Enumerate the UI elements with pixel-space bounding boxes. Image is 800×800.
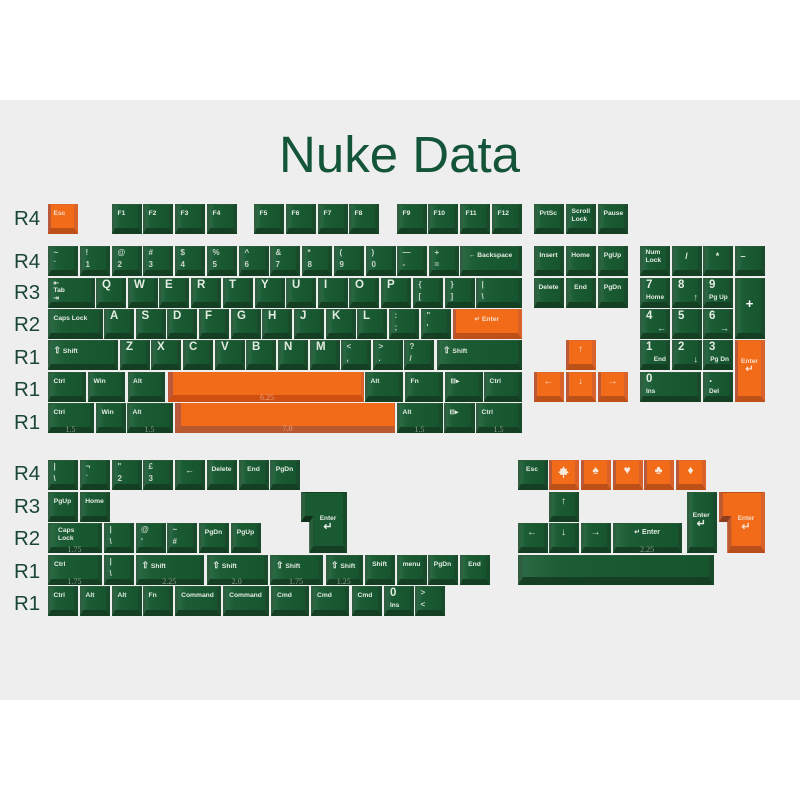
kit row 1: End bbox=[247, 466, 260, 473]
key: arrow down: ↓ bbox=[578, 376, 583, 386]
number key row: 1 bbox=[86, 260, 90, 269]
home key row: ' bbox=[426, 323, 428, 332]
navigation cluster: Home bbox=[571, 252, 590, 259]
numpad cluster: 3 bbox=[709, 341, 715, 353]
number key row: - bbox=[402, 260, 405, 269]
key: Tab: ⇤ bbox=[54, 280, 59, 286]
shift key row: , bbox=[346, 354, 349, 363]
number key row: ! bbox=[86, 248, 88, 257]
numpad cluster: Lock bbox=[646, 256, 661, 264]
number key row: # bbox=[148, 248, 153, 257]
QWERTY key row: ] bbox=[450, 292, 453, 300]
home key row: H bbox=[268, 310, 276, 322]
numpad cluster: 9 bbox=[709, 278, 715, 290]
space bar row 7u: Alt bbox=[132, 409, 141, 416]
kit row 4: 1.75 bbox=[68, 576, 82, 586]
shift key row: B bbox=[252, 341, 260, 353]
space bar row 7u: Win bbox=[102, 409, 114, 416]
kit row 4: \ bbox=[110, 568, 112, 578]
home key row: J bbox=[300, 310, 306, 322]
function key row: PrtSc bbox=[540, 210, 557, 217]
key: orange club: ♣ bbox=[655, 463, 662, 477]
numpad cluster: . bbox=[709, 372, 712, 384]
QWERTY key row: [ bbox=[418, 292, 421, 300]
kit row 1: 2 bbox=[118, 474, 122, 483]
kit row 3: ~ bbox=[172, 525, 177, 534]
key: Caps Lock bbox=[48, 309, 103, 339]
kit row 1: 3 bbox=[148, 474, 153, 483]
key: orange 7u space bar bbox=[175, 403, 395, 433]
number key row: @ bbox=[118, 248, 125, 257]
key: arrow up: ↑ bbox=[578, 344, 583, 355]
kit row 1: Delete bbox=[211, 466, 232, 473]
function key row: Scroll bbox=[572, 208, 590, 215]
function key row: Pause bbox=[604, 210, 623, 217]
key: green vertical Enter: Enter bbox=[693, 512, 710, 519]
kit row 5: Alt bbox=[86, 592, 94, 599]
key: orange Enter bbox=[453, 309, 522, 339]
number key row: & bbox=[276, 248, 281, 257]
QWERTY key row: I bbox=[324, 278, 327, 290]
shift key row: < bbox=[346, 342, 351, 351]
numpad cluster: ↑ bbox=[694, 292, 698, 302]
key: orange heart bbox=[613, 460, 643, 490]
number key row: 4 bbox=[180, 260, 185, 269]
key: numpad zero: Ins bbox=[646, 388, 655, 394]
numpad cluster bbox=[640, 246, 765, 402]
key: Enter 2.25u: ↵ Enter bbox=[634, 529, 660, 536]
numpad cluster: Del bbox=[709, 388, 719, 394]
space bar row 6.25u: Ctrl bbox=[490, 378, 501, 384]
kit row 5: Cmd bbox=[358, 592, 372, 599]
function key row: F7 bbox=[324, 210, 331, 217]
navigation cluster: PgUp bbox=[604, 252, 621, 259]
row label: bottom row R1: R1 bbox=[14, 411, 40, 434]
QWERTY key row bbox=[48, 278, 522, 308]
QWERTY key row: O bbox=[355, 278, 364, 290]
number key row: 8 bbox=[308, 260, 312, 269]
row label: home row R2: R2 bbox=[14, 313, 40, 336]
number key row: + bbox=[434, 248, 439, 257]
key: arrow left: ← bbox=[544, 376, 554, 386]
numpad cluster: 5 bbox=[678, 310, 684, 322]
function key row: Lock bbox=[572, 216, 587, 223]
kit row 1: ← bbox=[185, 465, 194, 475]
kit row 1: | bbox=[54, 462, 56, 471]
number key row: ^ bbox=[244, 248, 249, 257]
number key row: 6 bbox=[244, 260, 249, 269]
background band bbox=[0, 100, 800, 700]
key: orange numpad Enter bbox=[735, 340, 765, 402]
key: Shift 2.25u bbox=[136, 554, 204, 584]
key: orange diamond: ♦ bbox=[687, 463, 694, 477]
numpad cluster: ↓ bbox=[694, 354, 698, 364]
key: Shift 1.75u: 1.75 bbox=[289, 576, 303, 586]
kit row 5: Alt bbox=[118, 592, 126, 599]
space bar row 7u: 1.5 bbox=[144, 425, 154, 434]
home key row: " bbox=[426, 311, 430, 320]
kit row 4: menu bbox=[403, 560, 420, 568]
key: numpad plus: + bbox=[746, 296, 753, 310]
home key row: S bbox=[142, 310, 149, 322]
kit row 3: ' bbox=[141, 537, 143, 546]
function key row: F8 bbox=[354, 210, 362, 217]
accent key row: Esc bbox=[526, 466, 538, 473]
number key row: % bbox=[212, 248, 220, 257]
number key row: * bbox=[308, 248, 311, 257]
kit row 3: 1.75 bbox=[68, 545, 82, 554]
kit row 3: \ bbox=[110, 537, 112, 546]
title: Nuke Data bbox=[279, 126, 520, 183]
kit row 5: Cmd bbox=[317, 592, 332, 599]
key: Backspace: ← Backspace bbox=[469, 252, 512, 259]
navigation cluster: PgDn bbox=[604, 284, 621, 290]
function key row bbox=[48, 204, 628, 234]
number key row: = bbox=[434, 260, 439, 269]
key: green ISO Enter: Enter bbox=[319, 515, 336, 522]
key: left Shift: ⇧ Shift bbox=[54, 345, 78, 355]
key: arrow right bbox=[598, 372, 628, 402]
shift key row: . bbox=[378, 354, 381, 363]
QWERTY key row: E bbox=[165, 278, 173, 290]
row label: kit row 4 R1: R1 bbox=[14, 560, 40, 583]
space bar row 7u: ⊟▸ bbox=[450, 409, 458, 416]
numpad cluster: 8 bbox=[678, 278, 684, 290]
key: orange club bbox=[644, 460, 674, 490]
kit row 3: PgDn bbox=[205, 529, 222, 536]
home key row: L bbox=[363, 310, 370, 322]
kit row 1: £ bbox=[148, 462, 153, 471]
key: Shift 2u bbox=[206, 554, 268, 584]
kit row 3 bbox=[48, 523, 261, 554]
numpad cluster: 4 bbox=[646, 310, 652, 322]
orange arrow cluster bbox=[534, 340, 628, 402]
function key row: F10 bbox=[434, 210, 445, 217]
kit row 4: PgDn bbox=[434, 560, 451, 568]
key: Shift 1.25u bbox=[326, 554, 363, 584]
kit row 5: Cmd bbox=[277, 592, 292, 599]
numpad cluster: 7 bbox=[646, 278, 652, 290]
kit row 3: @ bbox=[141, 525, 149, 534]
number key row: ~ bbox=[54, 248, 58, 257]
key: orange Esc bbox=[48, 204, 78, 234]
numpad cluster: Num bbox=[646, 249, 660, 256]
key: green vertical Enter bbox=[687, 492, 717, 553]
key: orange ISO Enter bbox=[719, 492, 765, 553]
key: Tab: Tab bbox=[54, 287, 65, 294]
row label: kit row 1 R4: R4 bbox=[14, 462, 40, 485]
key: arrow up bbox=[566, 340, 596, 370]
kit row 5: Command bbox=[181, 592, 214, 599]
function key row: F4 bbox=[212, 210, 220, 217]
kit row 3: Lock bbox=[58, 534, 74, 542]
function key row: F2 bbox=[148, 210, 156, 217]
key: long green space bar bbox=[518, 554, 714, 584]
key: green arrow up: ↑ bbox=[561, 496, 566, 507]
space bar row 6.25u: Win bbox=[94, 378, 106, 384]
navigation cluster: Delete bbox=[538, 284, 559, 290]
numpad cluster: Home bbox=[646, 294, 664, 300]
key: orange maple leaf bbox=[549, 460, 579, 490]
function key row: F1 bbox=[118, 210, 125, 217]
function key row: F9 bbox=[402, 210, 410, 217]
key: numpad zero bbox=[640, 372, 701, 402]
key: orange spade bbox=[581, 460, 611, 490]
kit row 3: Caps bbox=[58, 527, 74, 534]
space bar row 7u: 1.5 bbox=[494, 425, 504, 434]
shift key row: Z bbox=[126, 341, 133, 353]
kit row 4: Shift bbox=[372, 560, 387, 568]
home key row: D bbox=[173, 310, 181, 322]
row label: shift row R1: R1 bbox=[14, 346, 40, 369]
QWERTY key row: Q bbox=[102, 278, 111, 290]
key: Backspace bbox=[460, 246, 522, 276]
home key row: ; bbox=[394, 323, 397, 332]
function key row: F12 bbox=[498, 210, 509, 217]
key: arrow left bbox=[534, 372, 564, 402]
QWERTY key row: { bbox=[418, 280, 422, 288]
numpad cluster: End bbox=[654, 356, 666, 363]
row label: QWERTY row R3: R3 bbox=[14, 281, 40, 304]
numpad cluster: Pg Dn bbox=[710, 356, 729, 363]
number key row: 5 bbox=[212, 260, 217, 269]
numpad cluster: / bbox=[685, 251, 688, 261]
kit row 5: 0 bbox=[390, 587, 396, 599]
key: green vertical Enter: ↵ bbox=[697, 518, 706, 530]
QWERTY key row: } bbox=[450, 280, 454, 288]
key: Shift 1.75u: ⇧ Shift bbox=[276, 560, 300, 570]
key: Enter 2.25u bbox=[613, 523, 682, 553]
accent key row bbox=[518, 460, 706, 490]
QWERTY key row: P bbox=[387, 278, 395, 290]
numpad cluster: * bbox=[716, 251, 719, 261]
number key row: 3 bbox=[148, 260, 153, 269]
key: orange 6.25u space bar: 6.25 bbox=[260, 392, 274, 402]
key: numpad zero: 0 bbox=[646, 372, 652, 384]
row label: kit row 5 R1: R1 bbox=[14, 592, 40, 615]
shift key row: > bbox=[378, 342, 383, 351]
space bar row 6.25u: ⊟▸ bbox=[450, 378, 459, 384]
space bar row 6.25u bbox=[48, 372, 522, 402]
numpad cluster: 1 bbox=[646, 341, 652, 353]
shift key row bbox=[48, 340, 522, 370]
number key row: 9 bbox=[340, 260, 344, 269]
QWERTY key row: R bbox=[197, 278, 205, 290]
kit row 4 bbox=[48, 555, 490, 586]
key: Tab: ⇥ bbox=[54, 294, 59, 302]
row label: kit row 2 R3: R3 bbox=[14, 495, 40, 518]
space bar row 6.25u: Ctrl bbox=[54, 378, 65, 384]
kit row 3: # bbox=[172, 537, 177, 546]
shift key row: X bbox=[157, 341, 165, 353]
number key row: 2 bbox=[118, 260, 122, 269]
key: right Shift: ⇧ Shift bbox=[443, 345, 467, 355]
key: Shift 2.25u: ⇧ Shift bbox=[142, 560, 166, 570]
key: orange ISO Enter: Enter bbox=[737, 515, 754, 522]
green arrows and Enter row bbox=[518, 523, 682, 554]
key: Shift 1.75u bbox=[270, 554, 323, 584]
key: Shift 2u: 2.0 bbox=[232, 576, 242, 586]
kit row 1: PgDn bbox=[276, 466, 293, 473]
kit row 3: PgUp bbox=[237, 529, 254, 536]
number key row: ) bbox=[372, 248, 374, 257]
key: right Shift bbox=[437, 340, 522, 370]
kit row 4: End bbox=[468, 560, 481, 568]
space bar row 6.25u: Alt bbox=[133, 378, 142, 384]
shift key row: ? bbox=[410, 342, 414, 351]
space bar row 7u: Ctrl bbox=[54, 409, 65, 416]
key: Shift 2.25u: 2.25 bbox=[162, 576, 176, 586]
key: Enter 2.25u: 2.25 bbox=[640, 545, 654, 554]
green arrows and Enter row: ← bbox=[527, 527, 537, 538]
key: orange heart: ♥ bbox=[624, 463, 631, 477]
home key row: G bbox=[237, 310, 246, 322]
key: orange numpad Enter: Enter bbox=[741, 358, 758, 365]
key: orange Esc: Esc bbox=[54, 210, 65, 217]
key: orange numpad Enter: ↵ bbox=[745, 364, 754, 375]
key: left Shift bbox=[48, 340, 118, 370]
number key row: ( bbox=[340, 248, 342, 257]
kit row 5: Command bbox=[229, 592, 262, 599]
home key row: F bbox=[205, 310, 212, 322]
kit row 1: ` bbox=[86, 474, 88, 483]
QWERTY key row: | bbox=[482, 280, 484, 288]
key: Caps Lock: Caps Lock bbox=[54, 315, 87, 322]
kit row 1: \ bbox=[54, 474, 56, 483]
QWERTY key row: Y bbox=[261, 278, 269, 290]
space bar row 7u: 1.5 bbox=[414, 425, 424, 434]
key: orange spade: ♠ bbox=[592, 463, 599, 477]
row label: number row R4: R4 bbox=[14, 250, 40, 273]
key: arrow right: → bbox=[608, 376, 618, 386]
space bar row 7u bbox=[48, 403, 522, 434]
QWERTY key row: U bbox=[292, 278, 300, 290]
numpad cluster: Pg Up bbox=[709, 294, 728, 300]
key: Shift 1.25u: 1.25 bbox=[337, 576, 351, 586]
key: numpad plus bbox=[735, 278, 765, 338]
numpad cluster: ← bbox=[657, 323, 666, 333]
number key row: — bbox=[402, 248, 410, 257]
shift key row: M bbox=[316, 341, 326, 353]
row label: kit row 3 R2: R2 bbox=[14, 527, 40, 550]
kit row 4: Ctrl bbox=[54, 560, 66, 568]
kit row 4: | bbox=[110, 556, 112, 566]
kit row 5: Ctrl bbox=[54, 592, 65, 599]
navigation cluster: End bbox=[574, 284, 587, 290]
space bar row 6.25u: Alt bbox=[370, 378, 379, 384]
shift key row: N bbox=[284, 341, 292, 353]
kit row 5: < bbox=[420, 600, 425, 609]
space bar row 6.25u: Fn bbox=[410, 378, 419, 384]
navigation cluster bbox=[534, 246, 628, 308]
number key row: 7 bbox=[276, 260, 280, 269]
navigation cluster: Insert bbox=[539, 252, 558, 259]
function key row: F3 bbox=[180, 210, 188, 217]
kit row 1: ¬ bbox=[86, 462, 90, 471]
green arrows and Enter row: ↓ bbox=[561, 527, 566, 538]
space bar row 7u: Ctrl bbox=[482, 409, 493, 416]
kit row 5: > bbox=[420, 588, 425, 597]
QWERTY key row: T bbox=[229, 278, 236, 290]
row label: space row R1: R1 bbox=[14, 378, 40, 401]
key: orange 7u space bar: 7.0 bbox=[282, 424, 292, 433]
key: arrow down bbox=[566, 372, 596, 402]
shift key row: V bbox=[221, 341, 229, 353]
kit row 5 bbox=[48, 586, 445, 616]
kit row 1: " bbox=[118, 462, 121, 471]
key: orange 6.25u space bar bbox=[168, 372, 364, 402]
green arrows and Enter row: → bbox=[590, 527, 600, 538]
kit row 5: Fn bbox=[148, 592, 157, 599]
QWERTY key row: W bbox=[134, 278, 145, 290]
key: green ISO Enter: ↵ bbox=[323, 521, 332, 533]
numpad cluster: 6 bbox=[709, 310, 715, 322]
key: Shift 2u: ⇧ Shift bbox=[212, 560, 237, 570]
key: green arrow up bbox=[549, 492, 579, 522]
key: green ISO Enter bbox=[301, 492, 347, 553]
home key row: K bbox=[332, 310, 340, 322]
key: orange diamond bbox=[676, 460, 706, 490]
kit row 2 bbox=[48, 492, 110, 522]
key: orange ISO Enter: ↵ bbox=[741, 521, 750, 533]
number key row bbox=[48, 246, 522, 276]
number key row: $ bbox=[180, 248, 185, 257]
kit row 2: PgUp bbox=[54, 498, 71, 505]
kit row 2: Home bbox=[85, 498, 104, 505]
home key row: A bbox=[110, 310, 118, 322]
row label: function row R4: R4 bbox=[14, 207, 40, 230]
function key row: F5 bbox=[260, 210, 267, 217]
key: Tab bbox=[48, 278, 95, 308]
shift key row: C bbox=[189, 341, 197, 353]
kit row 5: Ins bbox=[390, 602, 399, 609]
kit row 3: | bbox=[110, 525, 112, 534]
QWERTY key row: \ bbox=[482, 292, 484, 300]
function key row: F11 bbox=[466, 210, 477, 217]
number key row: 0 bbox=[372, 260, 376, 269]
numpad cluster: – bbox=[740, 251, 746, 261]
home key row bbox=[48, 309, 522, 339]
key: Shift 1.25u: ⇧ Shift bbox=[331, 560, 355, 570]
key: orange Enter: ↵ Enter bbox=[474, 316, 499, 323]
home key row: : bbox=[394, 311, 397, 320]
shift key row: / bbox=[410, 354, 412, 363]
number key row: ` bbox=[54, 260, 56, 269]
space bar row 7u: 1.5 bbox=[66, 425, 76, 434]
numpad cluster: → bbox=[720, 323, 729, 333]
function key row: F6 bbox=[292, 210, 299, 217]
numpad cluster: 2 bbox=[678, 341, 684, 353]
kit row 1 bbox=[48, 460, 300, 490]
space bar row 7u: Alt bbox=[402, 409, 411, 416]
